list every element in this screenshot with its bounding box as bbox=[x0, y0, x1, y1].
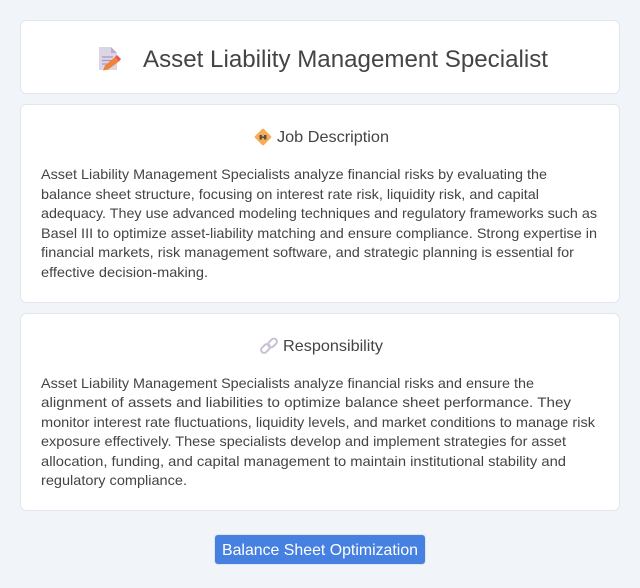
responsibility text: alignment of assets and liabilities to optimize balance sheet performance. They bbox=[41, 394, 571, 410]
panel: responsibility bbox=[20, 313, 620, 511]
job description heading: Job Description bbox=[277, 129, 389, 146]
job description text: financial markets, risk management software, and strategic planning is essential for bbox=[41, 244, 574, 260]
panel: title bbox=[20, 20, 620, 94]
job description text: Basel III to optimize asset-liability matching and ensure compliance. Strong expertise in bbox=[41, 225, 597, 241]
title heading: Asset Liability Management Specialist bbox=[143, 46, 548, 73]
job description text: balance sheet structure, focusing on interest rate risk, liquidity risk, and capital bbox=[41, 186, 539, 202]
responsibility text: regulatory compliance. bbox=[41, 472, 187, 488]
tag: balance sheet optimization: Balance Sheet Optimization bbox=[222, 542, 418, 559]
responsibility text: monitor interest rate fluctuations, liquidity levels, and market conditions to manage risk bbox=[41, 414, 596, 430]
panel: job description bbox=[20, 104, 620, 303]
job description text bbox=[41, 166, 597, 280]
icon: document with pencil bbox=[99, 47, 121, 70]
icon: chain link bbox=[260, 338, 278, 354]
responsibility text: exposure effectively. These specialists develop and implement strategies for asset bbox=[41, 433, 566, 449]
job description text: effective decision-making. bbox=[41, 264, 208, 280]
icon: orange diamond bbox=[254, 128, 272, 146]
tag: balance sheet optimization bbox=[214, 534, 426, 565]
responsibility text: allocation, funding, and capital management to maintain institutional stability and bbox=[41, 453, 566, 469]
responsibility text: Asset Liability Management Specialists analyze financial risks and ensure the bbox=[41, 375, 534, 391]
responsibility heading: Responsibility bbox=[283, 338, 383, 355]
job description text: Asset Liability Management Specialists analyze financial risks by evaluating the bbox=[41, 166, 547, 182]
responsibility text bbox=[41, 375, 596, 488]
job description text: adequacy. They use advanced modeling techniques and regulatory frameworks such as bbox=[41, 205, 597, 221]
